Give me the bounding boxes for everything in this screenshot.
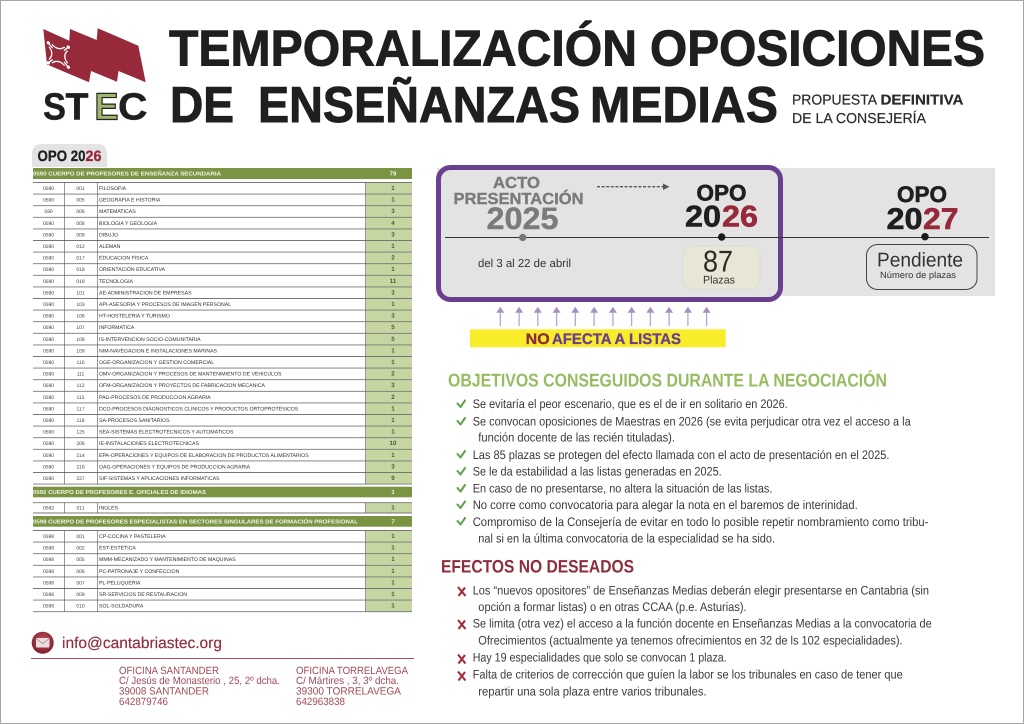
icon: mail bbox=[32, 632, 54, 654]
table rows: 0598: 009 bbox=[76, 592, 85, 598]
table rows: 0590: MATEMATICAS bbox=[99, 209, 136, 215]
office: Santander: 642879746 bbox=[119, 696, 168, 708]
table rows: 0590: 0590 bbox=[43, 244, 54, 250]
tab heading: OPO 2026: 26 bbox=[86, 148, 102, 165]
table rows: 0590: 2 bbox=[391, 394, 395, 401]
table rows: 0590: 3 bbox=[391, 313, 395, 320]
milestone: OPO 2026 bbox=[685, 181, 758, 241]
table rows: 0590: 001 bbox=[76, 186, 85, 192]
table rows: 0590: 3 bbox=[391, 382, 395, 389]
table rows: 0590: PAG-PROCESOS DE PRODUCCION AGRARIA bbox=[99, 395, 211, 401]
logo wordmark bbox=[43, 86, 148, 128]
title: DE bbox=[170, 76, 234, 133]
table rows: 0590: 115 bbox=[77, 395, 85, 401]
purple highlight box bbox=[438, 168, 780, 300]
table rows: 0590: 0590 bbox=[43, 314, 54, 320]
item with cross bbox=[458, 617, 932, 648]
item with check: Se evitaría el peor escenario, que es el de ir en solitario en 2026. bbox=[473, 397, 788, 411]
item with check: Compromiso de la Consejería de evitar en todo lo posible repetir nombramiento como tribu- bbox=[473, 515, 928, 529]
table rows: 0590: GEOGRAFIA E HISTORIA bbox=[99, 198, 161, 204]
table header: 0590: 0590 CUERPO DE PROFESORES DE ENSEÑANZA SECUNDARIA bbox=[33, 170, 221, 178]
table rows: 0598: CP-COCINA Y PASTELERIA bbox=[99, 534, 166, 540]
table rows: 0598: 0598 bbox=[43, 546, 54, 552]
table rows: 0590: 216 bbox=[76, 464, 85, 470]
table rows: 0598: 1 bbox=[391, 591, 395, 598]
table rows: 0590: 0590 bbox=[43, 290, 54, 296]
table rows: 0598: 0598 bbox=[43, 569, 54, 575]
table rows: 0590: 1 bbox=[391, 266, 395, 273]
pending card bbox=[866, 244, 977, 290]
table cell backgrounds and rules bbox=[33, 182, 412, 612]
table rows: 0590: 118 bbox=[77, 418, 85, 424]
office: Torrelavega: C/ Mártires , 3, 3º dcha. bbox=[296, 675, 399, 687]
title bbox=[169, 20, 985, 133]
table rows: 0590: 0590 bbox=[43, 430, 54, 436]
table rows: 0598: 0598 bbox=[43, 592, 54, 598]
table rows: 0590: 3 bbox=[391, 463, 395, 470]
table rows: 0590: INFORMATICA bbox=[99, 325, 135, 331]
table rows: 0590: 3 bbox=[391, 208, 395, 215]
milestone: OPO 2027: OPO bbox=[897, 182, 947, 207]
item with check: En caso de no presentarse, no altera la situación de las listas. bbox=[473, 481, 772, 495]
table rows: 0590: 0590 bbox=[43, 337, 54, 343]
milestone: OPO 2027: 27 bbox=[923, 203, 958, 236]
table rows: 0590: 1 bbox=[391, 417, 395, 424]
table rows: 0590: 1 bbox=[391, 359, 395, 366]
table rows: 0590: 106 bbox=[76, 314, 85, 320]
table rows: 0590: EPA-OPERACIONES Y EQUIPOS DE ELABORACION DE PRODUCTOS ALIMENTARIOS bbox=[99, 453, 309, 459]
table rows: 0590: 0590 bbox=[43, 476, 54, 482]
table rows: 0590: 018 bbox=[76, 267, 85, 273]
table rows: 0590: 1 bbox=[391, 429, 395, 436]
table rows: 0590: 109 bbox=[76, 348, 85, 354]
title: MEDIAS bbox=[590, 76, 778, 133]
table rows: 0598: 007 bbox=[76, 580, 85, 586]
table rows: 0590: IS-INTERVENCION SOCIO-COMUNITARIA bbox=[99, 337, 201, 343]
icon: red lightning flag bbox=[43, 28, 146, 82]
table rows: 0590: DCO-PROCESOS DIAGNOSTICOS CLINICOS Y PRODUCTOS ORTOPROTESICOS bbox=[99, 406, 299, 412]
table rows: 0590: NIM-NAVEGACION E INSTALACIONES MARINAS bbox=[99, 348, 218, 354]
table rows: 0590: 4 bbox=[391, 220, 395, 227]
table header: 0592: 1 bbox=[391, 489, 395, 496]
table rows: 0598: 1 bbox=[391, 579, 395, 586]
table rows: 0590: 107 bbox=[76, 325, 85, 331]
table rows: 0590: HT-HOSTELERIA Y TURISMO bbox=[99, 314, 170, 320]
plazas card: 87: Plazas bbox=[703, 274, 735, 286]
table rows: 0590: BIOLOGIA Y GEOLOGIA bbox=[99, 221, 158, 227]
arrows: up to timeline bbox=[496, 307, 711, 326]
table rows: 0590: 0590 bbox=[43, 267, 54, 273]
office: Santander: C/ Jesús de Monasterio , 25, 2º dcha. bbox=[119, 675, 280, 687]
item with cross: repartir una sola plaza entre varios tribunales. bbox=[478, 684, 707, 698]
milestone: OPO 2026: OPO bbox=[696, 181, 746, 206]
table rows: 0590: 005 bbox=[76, 198, 85, 204]
item with check: No corre como convocatoria para alegar la nota en el baremos de interinidad. bbox=[473, 498, 858, 512]
table header: 0590 bbox=[33, 168, 412, 179]
table rows: 0598: 1 bbox=[391, 568, 395, 575]
table rows: 0590: 5 bbox=[391, 324, 395, 331]
item with cross: Los “nuevos opositores” de Enseñanzas Medias deberán elegir presentarse en Cantabria (sin bbox=[473, 583, 929, 597]
table rows: 0590: 0590 bbox=[43, 441, 54, 447]
table rows: 0598: 0598 bbox=[43, 557, 54, 563]
table rows: 0590: 0590 bbox=[43, 186, 54, 192]
table rows: 0590: 1 bbox=[391, 301, 395, 308]
table rows: 0590: 125 bbox=[76, 430, 85, 436]
milestone: OPO 2027 bbox=[886, 182, 958, 240]
logo wordmark: T bbox=[66, 86, 88, 128]
logo wordmark: C bbox=[118, 86, 148, 128]
table rows: 0590: 103 bbox=[76, 302, 85, 308]
email address: info@cantabriastec.org bbox=[62, 635, 222, 652]
table rows: 0590: 108 bbox=[76, 337, 85, 343]
item with cross: Hay 19 especialidades que solo se convocan 1 plaza. bbox=[473, 651, 727, 665]
office: Torrelavega bbox=[296, 665, 408, 708]
table rows: 0590: 0590 bbox=[43, 464, 54, 470]
callout: no afecta a listas: AFECTA A LISTAS bbox=[552, 331, 681, 348]
table rows: 0598: 1 bbox=[391, 545, 395, 552]
table rows: 0590: 2 bbox=[391, 371, 395, 378]
pending card: Pendiente bbox=[877, 250, 963, 272]
item with check: Se le da estabilidad a las listas generadas en 2025. bbox=[473, 465, 722, 479]
table header: 0590: 79 bbox=[390, 171, 397, 178]
item with cross bbox=[458, 583, 929, 614]
subtitle: DE LA CONSEJERÍA bbox=[792, 110, 926, 127]
table rows: 0590: 9 bbox=[391, 475, 395, 482]
table rows: 0590: 0590 bbox=[43, 221, 54, 227]
item with check bbox=[458, 414, 911, 445]
table rows: 0590: 214 bbox=[76, 453, 85, 459]
subtitle: PROPUESTA bbox=[792, 92, 877, 108]
table rows: 0590: 206 bbox=[76, 441, 85, 447]
table rows: 0590: 117 bbox=[77, 406, 85, 412]
table rows: 0590: SEA-SISTEMAS ELECTROTECNICOS Y AUTOMATICOS bbox=[99, 430, 234, 436]
office: Santander bbox=[119, 665, 280, 708]
table rows: 0590: 5 bbox=[391, 336, 395, 343]
table rows: 0590: 006 bbox=[76, 209, 85, 215]
table rows: 0590: 009 bbox=[76, 232, 85, 238]
table rows: 0590: 11 bbox=[390, 278, 397, 285]
subtitle: DEFINITIVA bbox=[880, 92, 964, 108]
table rows: 0598: 0598 bbox=[43, 534, 54, 540]
table rows: 0590: 590 bbox=[44, 209, 53, 215]
list: objetivos bbox=[458, 397, 928, 546]
table rows: 0590: 227 bbox=[76, 476, 85, 482]
table rows: 0598: SR-SERVICIOS DE RESTAURACION bbox=[99, 592, 187, 598]
table rows: 0590: API-ASESORIA Y PROCESOS DE IMAGEN PERSONAL bbox=[99, 302, 231, 308]
item with check: Se convocan oposiciones de Maestras en 2026 (se evita perjudicar otra vez el acceso a la bbox=[473, 414, 911, 428]
table rows: 0598: 001 bbox=[76, 534, 85, 540]
panel: timeline bbox=[437, 168, 995, 300]
arrow: dashed to OPO 2026 bbox=[597, 184, 670, 190]
pending card: Número de plazas bbox=[880, 270, 957, 280]
table rows: 0590: 101 bbox=[76, 290, 85, 296]
table rows: 0590: OFM-ORGANIZACION Y PROYECTOS DE FABRICACION MECANICA bbox=[99, 383, 266, 389]
table rows: 0598: 002 bbox=[76, 546, 85, 552]
table rows: 0590: EDUCACION FISICA bbox=[99, 256, 149, 262]
item with cross: opción a formar listas) o en otras CCAA (p.e. Asturias). bbox=[478, 600, 747, 614]
table header: 0592 bbox=[33, 487, 412, 497]
item with cross: Falta de criterios de corrección que guíen la labor se los tribunales en caso de tener que bbox=[473, 667, 903, 681]
title: TEMPORALIZACIÓN bbox=[169, 20, 637, 76]
list: efectos bbox=[458, 583, 932, 698]
table rows: 0598: 0598 bbox=[43, 604, 54, 610]
table rows: 0590: 1 bbox=[391, 405, 395, 412]
table rows: 0590: 110 bbox=[77, 360, 85, 366]
table rows: 0590: 1 bbox=[391, 452, 395, 459]
table rows: 0590: 111 bbox=[77, 372, 85, 378]
heading: objetivos conseguidos: OBJETIVOS CONSEGUIDOS DURANTE LA NEGOCIACIÓN bbox=[448, 370, 887, 391]
milestone: OPO 2026: 20 bbox=[685, 201, 721, 234]
table rows: 0590: AE-ADMINISTRACION DE EMPRESAS bbox=[99, 290, 192, 296]
table rows: 0590: 0590 bbox=[43, 383, 54, 389]
table rows: 0590: 019 bbox=[76, 279, 85, 285]
title: OPOSICIONES bbox=[650, 20, 985, 76]
item with check: Las 85 plazas se protegen del efecto llamada con el acto de presentación en el 2025. bbox=[473, 448, 889, 462]
table rows: 0590: 1 bbox=[391, 243, 395, 250]
plazas card: 87: 87 bbox=[703, 246, 733, 279]
item with check: función docente de las recién tituladas). bbox=[478, 431, 675, 445]
office: Torrelavega: 39300 TORRELAVEGA bbox=[296, 686, 401, 698]
table row: 0592: 1 bbox=[391, 504, 395, 511]
table header: 0598: 7 bbox=[391, 518, 395, 525]
table rows: 0590: 0590 bbox=[43, 348, 54, 354]
logo wordmark: S bbox=[43, 86, 66, 128]
tab heading: OPO 2026: OPO 20 bbox=[38, 148, 86, 165]
milestone: OPO 2026: 26 bbox=[722, 201, 758, 234]
title: ENSEÑANZAS bbox=[258, 76, 580, 133]
table row: 0592 bbox=[43, 504, 395, 511]
office: Torrelavega: 642963838 bbox=[296, 696, 345, 708]
table rows: 0598: 1 bbox=[391, 556, 395, 563]
table rows: 0590 bbox=[43, 185, 397, 482]
milestone: acto presentación 2025 bbox=[454, 175, 584, 241]
table rows: 0590: 0590 bbox=[43, 395, 54, 401]
table rows: 0590: OAG-OPERACIONES Y EQUIPOS DE PRODUCCION AGRARIA bbox=[99, 464, 251, 470]
table rows: 0590: DIBUJO bbox=[99, 232, 118, 238]
table rows: 0590: 017 bbox=[76, 256, 85, 262]
table rows: 0590: 008 bbox=[76, 221, 85, 227]
office: Torrelavega: OFICINA TORRELAVEGA bbox=[296, 665, 408, 677]
table rows: 0598 bbox=[43, 533, 395, 610]
table rows: 0590: 1 bbox=[391, 197, 395, 204]
table rows: 0590: 012 bbox=[76, 244, 85, 250]
table rows: 0590: 0590 bbox=[43, 232, 54, 238]
table rows: 0590: 1 bbox=[391, 347, 395, 354]
table rows: 0590: 0590 bbox=[43, 406, 54, 412]
table rows: 0598: 0598 bbox=[43, 580, 54, 586]
table rows: 0598: 005 bbox=[76, 557, 85, 563]
table row: 0592: INGLES bbox=[99, 505, 119, 511]
table rows: 0590: ALEMAN bbox=[99, 244, 121, 250]
table rows: 0590: SIF-SISTEMAS Y APLICACIONES INFORMATICAS bbox=[99, 476, 220, 482]
tab heading: OPO 2026 bbox=[32, 144, 107, 167]
table header: 0598 bbox=[33, 516, 412, 527]
table rows: 0598: 1 bbox=[391, 533, 395, 540]
table row: 0592: 0592 bbox=[43, 505, 54, 511]
table rows: 0590: 0590 bbox=[43, 325, 54, 331]
table rows: 0590: FILOSOFIA bbox=[99, 186, 127, 192]
item with cross: Se limita (otra vez) el acceso a la función docente en Enseñanzas Medias a la convocatoria de bbox=[473, 617, 932, 631]
icon: white cross emblem bbox=[47, 42, 69, 68]
table rows: 0598: 010 bbox=[76, 604, 85, 610]
table rows: 0590: 0590 bbox=[43, 256, 54, 262]
table rows: 0590: SA-PROCESOS SANITARIOS bbox=[99, 418, 170, 424]
table rows: 0598: SOL-SOLDADURA bbox=[99, 604, 144, 610]
table header: 0598: 0598 CUERPO DE PROFESORES ESPECIALISTAS EN SECTORES SINGULARES DE FORMACIÓN PROFESIONAL bbox=[33, 517, 359, 525]
table header: 0592: 0592 CUERPO DE PROFESORES E. OFICIALES DE IDIOMAS bbox=[33, 490, 206, 496]
table rows: 0598: EST-ESTETICA bbox=[99, 546, 136, 552]
table rows: 0590: 1 bbox=[391, 185, 395, 192]
table rows: 0590: 0590 bbox=[43, 418, 54, 424]
office: Santander: OFICINA SANTANDER bbox=[119, 665, 219, 677]
table rows: 0590: OMV-ORGANIZACION Y PROCESOS DE MANTENIMIENTO DE VEHICULOS bbox=[99, 372, 282, 378]
table rows: 0590: TECNOLOGIA bbox=[99, 279, 134, 285]
milestone: acto presentación 2025: PRESENTACIÓN bbox=[454, 189, 584, 208]
callout: no afecta a listas bbox=[470, 329, 726, 348]
table rows: 0590: OGE-ORGANIZACION Y GESTION COMERCIAL bbox=[99, 360, 214, 366]
item with check bbox=[458, 515, 928, 546]
milestone: acto presentación 2025: 2025 bbox=[486, 201, 558, 236]
heading: efectos no deseados: EFECTOS NO DESEADOS bbox=[441, 557, 634, 577]
plazas card: 87 bbox=[683, 246, 760, 289]
table rows: 0590: 0590 bbox=[43, 302, 54, 308]
subtitle bbox=[792, 92, 964, 127]
table rows: 0590: 3 bbox=[391, 231, 395, 238]
table rows: 0590: 0590 bbox=[43, 372, 54, 378]
table rows: 0598: 1 bbox=[391, 603, 395, 610]
table rows: 0590: 2 bbox=[391, 255, 395, 262]
callout: no afecta a listas: NO bbox=[526, 331, 550, 348]
logo wordmark: E bbox=[94, 86, 118, 128]
logo: STEC bbox=[43, 28, 148, 128]
table rows: 0590: IE-INSTALACIONES ELECTROTECNICAS bbox=[99, 441, 199, 447]
milestone: acto presentación 2025: ACTO bbox=[493, 175, 540, 192]
table row: 0592: 011 bbox=[77, 505, 85, 511]
table rows: 0590: 3 bbox=[391, 289, 395, 296]
table rows: 0590: 0590 bbox=[43, 453, 54, 459]
table rows: 0590: ORIENTACIÓN EDUCATIVA bbox=[99, 266, 166, 273]
dates: del 3 al 22 de abril bbox=[478, 258, 571, 270]
item with cross: Ofrecimientos (actualmente ya tenemos ofrecimientos en 32 de ls 102 especialidades). bbox=[478, 634, 903, 648]
table rows: 0590: 0590 bbox=[43, 279, 54, 285]
item with check: nal si en la última convocatoria de la especialidad se ha sido. bbox=[478, 532, 775, 546]
table rows: 0598: PC-PATRONAJE Y CONFECCION bbox=[99, 569, 180, 575]
table rows: 0598: MMM-MECANIZADO Y MANTENIMIENTO DE MAQUINAS bbox=[99, 557, 236, 563]
table rows: 0590: 112 bbox=[77, 383, 85, 389]
milestone: OPO 2027: 20 bbox=[886, 203, 922, 236]
table rows: 0598: 006 bbox=[76, 569, 85, 575]
contact block bbox=[31, 632, 414, 708]
office: Santander: 39008 SANTANDER bbox=[119, 686, 209, 698]
table rows: 0590: 10 bbox=[390, 440, 397, 447]
item with cross bbox=[458, 667, 903, 698]
panel: OPO 2026 table bbox=[32, 144, 412, 612]
table rows: 0590: 0590 bbox=[43, 360, 54, 366]
table rows: 0598: PL-PELUQUERIA bbox=[99, 580, 141, 586]
table rows: 0590: 0590 bbox=[43, 198, 54, 204]
